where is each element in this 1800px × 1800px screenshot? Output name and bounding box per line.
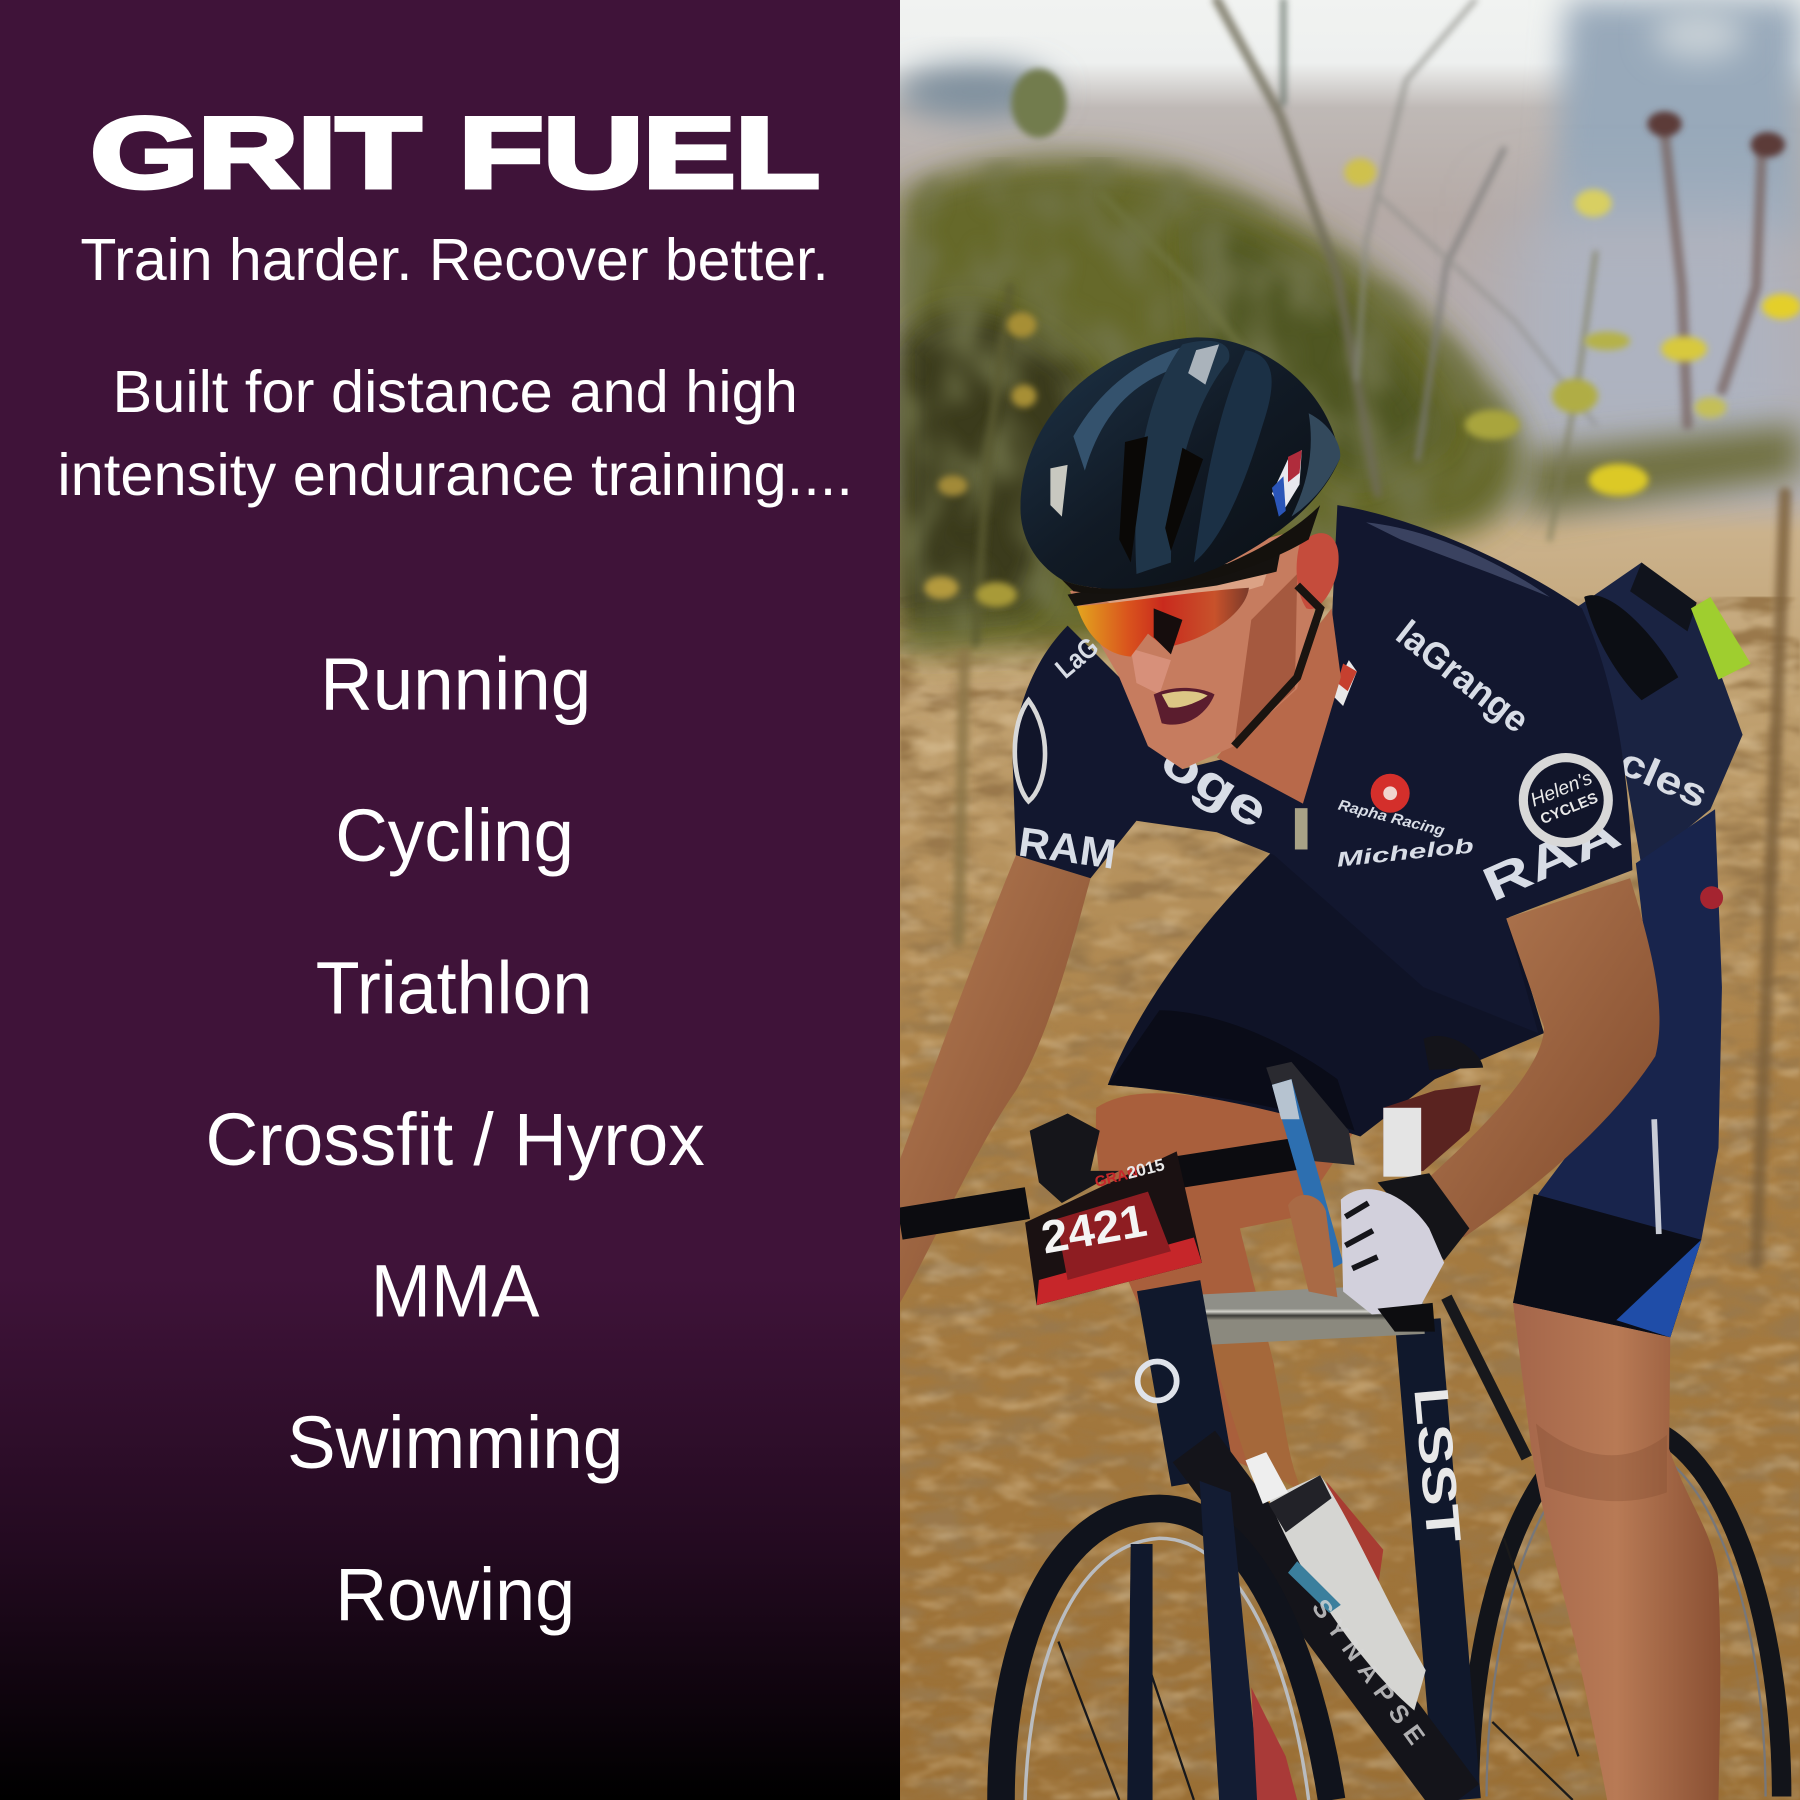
title: GRIT FUEL — [91, 98, 820, 209]
far arm — [900, 855, 1091, 1303]
rear wheel — [1469, 1424, 1782, 1800]
glove and hand — [1288, 1189, 1444, 1314]
intro text: Built for distance and high — [113, 358, 798, 425]
race number plate: 2421 — [1037, 1194, 1150, 1263]
sleeve badge — [1519, 753, 1613, 847]
knee shadow — [1536, 1423, 1667, 1501]
sleeve badge: Helen's — [1527, 767, 1596, 812]
sleeve badge: CYCLES — [1538, 790, 1601, 828]
watch — [1378, 1173, 1469, 1260]
blurred background landscape — [895, 0, 1800, 1800]
bag on back: cles — [1613, 740, 1714, 817]
jersey logo text: laGrange — [1389, 612, 1537, 741]
race number plate: GRAN — [1093, 1164, 1140, 1191]
jersey — [1012, 505, 1632, 921]
tagline: Train harder. Recover better. — [80, 226, 829, 293]
jersey logo text: Michelob — [1335, 834, 1475, 872]
jersey logo text: Rapha Racing — [1336, 797, 1446, 840]
list of sports: Cycling — [335, 793, 574, 877]
near arm — [1423, 878, 1659, 1238]
list of sports: Crossfit / Hyrox — [205, 1097, 705, 1181]
down tube lettering: SYNAPSE — [1306, 1594, 1430, 1750]
front wheel — [1001, 1508, 1332, 1800]
far lower leg — [1212, 1342, 1299, 1487]
water bottle — [1246, 1452, 1426, 1710]
far sleeve badge — [1015, 700, 1045, 801]
far knee and thigh — [1096, 1093, 1355, 1481]
bag on back — [1578, 562, 1751, 867]
neck — [1217, 608, 1341, 804]
jersey logo text: LaG — [1049, 631, 1104, 684]
helmet strap — [1234, 585, 1320, 746]
head tube logo — [1138, 1361, 1177, 1401]
near lower leg — [1513, 1303, 1720, 1800]
jersey logo text: oge — [1151, 730, 1279, 839]
helmet — [1020, 337, 1340, 594]
frame lettering: LSST — [1403, 1385, 1471, 1544]
plant stems — [959, 0, 1785, 1263]
list of sports: Triathlon — [316, 946, 592, 1030]
bicycle frame — [1169, 1286, 1527, 1800]
jersey logo text: RAM — [1016, 819, 1119, 878]
panel: cyclist photo — [900, 0, 1800, 1800]
ear — [1297, 533, 1339, 609]
mouth — [1154, 688, 1215, 725]
jersey logo text: RAA — [1475, 805, 1628, 912]
blurred bush — [900, 157, 1522, 654]
cycling shorts — [1108, 849, 1544, 1136]
bike computer — [1030, 1114, 1119, 1203]
face — [1070, 530, 1339, 769]
list of sports: Swimming — [287, 1400, 623, 1484]
fork — [1200, 1481, 1260, 1800]
list of sports: MMA — [371, 1249, 540, 1333]
brake lever — [1266, 1062, 1355, 1272]
jersey logo text — [1016, 612, 1628, 912]
list of sports: Rowing — [335, 1552, 575, 1636]
top-tube hand shadow — [1378, 1303, 1435, 1332]
intro text — [57, 358, 853, 508]
panel: product text — [0, 0, 900, 1742]
hip and rear shorts — [1513, 809, 1723, 1337]
sunglasses — [1068, 553, 1280, 657]
yellow flowers — [924, 69, 1800, 607]
seat post and saddle — [1383, 1036, 1483, 1177]
list of sports — [205, 641, 705, 1636]
race number plate — [1025, 1151, 1202, 1305]
far pedal foot — [1251, 1688, 1297, 1800]
race number plate: 2015 — [1125, 1154, 1167, 1183]
list of sports: Running — [320, 641, 591, 725]
shorts highlight — [1108, 1010, 1355, 1131]
intro text: intensity endurance training.... — [57, 441, 853, 508]
handlebar — [900, 1154, 1297, 1224]
